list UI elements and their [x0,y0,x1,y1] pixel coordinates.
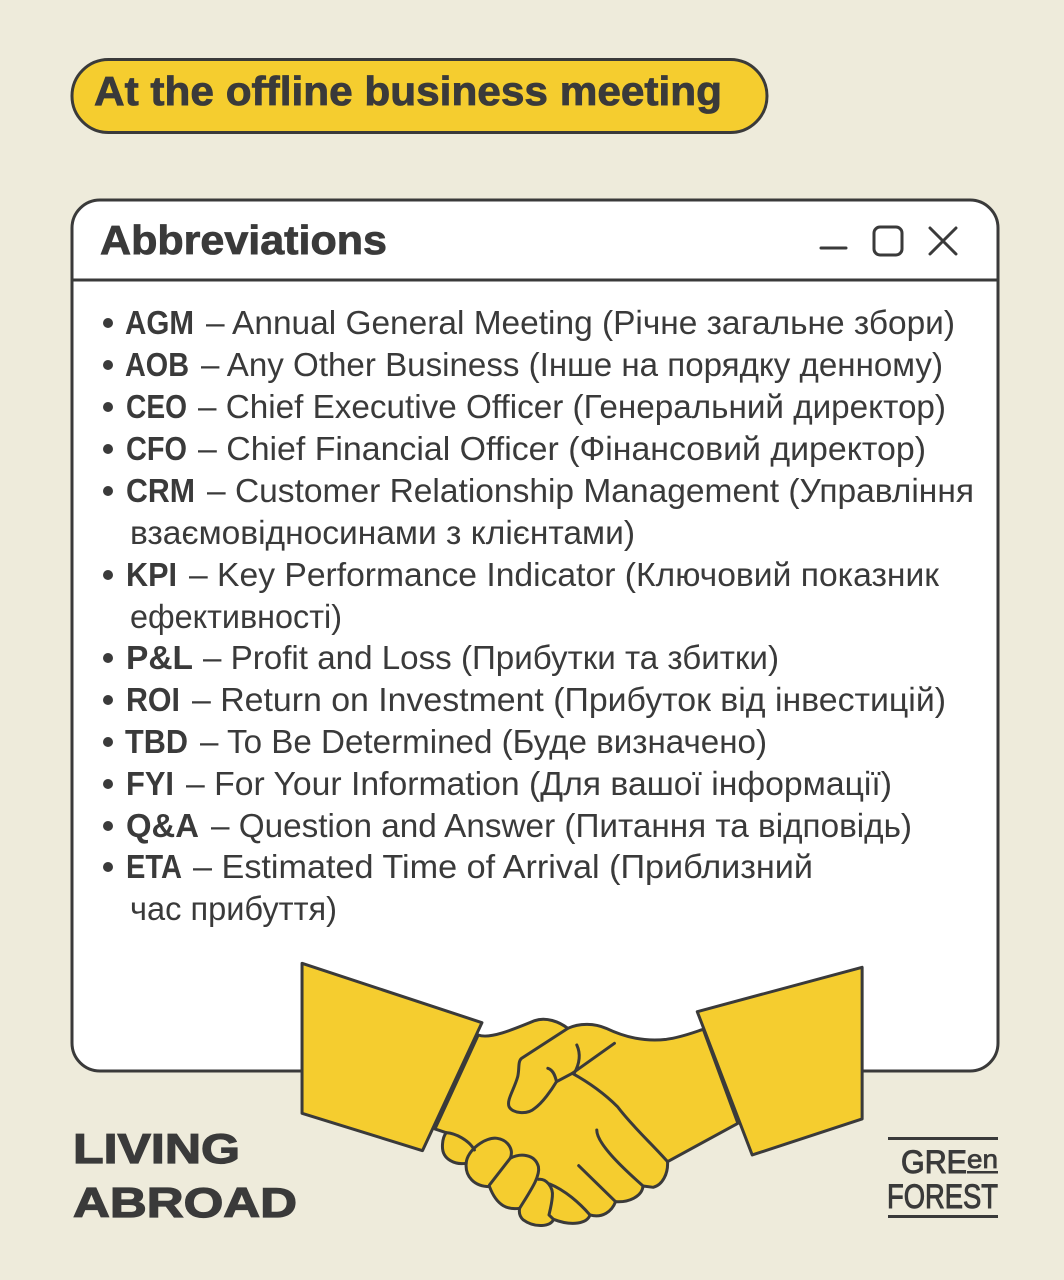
abbreviation list: – Customer Relationship Management (Управління [207,472,974,509]
abbreviation list: TBD [125,723,188,760]
abbreviation list: P&L [126,639,193,676]
window heading: Abbreviations [100,217,387,263]
abbreviation list: – Return on Investment (Прибуток від інвестицій) [192,681,946,718]
abbreviation list: KPI [126,556,177,593]
abbreviation list: CFO [126,430,187,467]
right cuff [697,967,862,1155]
brand text: Living Abroad: ABROAD [73,1179,297,1226]
abbreviation list: Q&A [126,807,199,844]
logo: Green Forest: FOREST [887,1178,998,1216]
abbreviation list: – For Your Information (Для вашої інформації) [186,765,892,802]
abbreviation list: – Key Performance Indicator (Ключовий показник [189,556,940,593]
abbreviation list [103,304,974,927]
abbreviation list: взаємовідносинами з клієнтами) [130,514,635,551]
abbreviation list: AGM [125,304,194,341]
abbreviation list: ROI [126,681,180,718]
abbreviation list: ETA [126,848,182,885]
abbreviation list: – Profit and Loss (Прибутки та збитки) [203,639,779,676]
abbreviation list: FYI [126,765,174,802]
logo: Green Forest: en [967,1144,998,1174]
title pill: At the offline business meeting [94,68,722,114]
brand text: Living Abroad [73,1125,297,1226]
abbreviation list: – Chief Executive Officer (Генеральний директор) [198,388,946,425]
logo: Green Forest [887,1137,998,1218]
abbreviation list: ефективності) [130,598,342,635]
panel: abbreviations window [72,200,998,1071]
abbreviation list: – Any Other Business (Інше на порядку денному) [201,346,943,383]
abbreviation list: – Chief Financial Officer (Фінансовий директор) [198,430,926,467]
brand text: Living Abroad: LIVING [73,1125,240,1172]
title pill [72,60,767,132]
abbreviation list: час прибуття) [130,890,337,927]
abbreviation list: – Question and Answer (Питання та відповідь) [211,807,912,844]
icon: handshake [302,963,862,1226]
logo: Green Forest: GRE [901,1144,967,1180]
abbreviation list: AOB [125,346,189,383]
abbreviation list: – Estimated Time of Arrival (Приблизний [193,848,813,885]
icon: window controls [821,227,956,255]
left cuff [302,963,482,1151]
abbreviation list: CRM [126,472,195,509]
abbreviation list: – To Be Determined (Буде визначено) [200,723,767,760]
abbreviation list: CEO [126,388,187,425]
abbreviation list: – Annual General Meeting (Річне загальне збори) [206,304,955,341]
